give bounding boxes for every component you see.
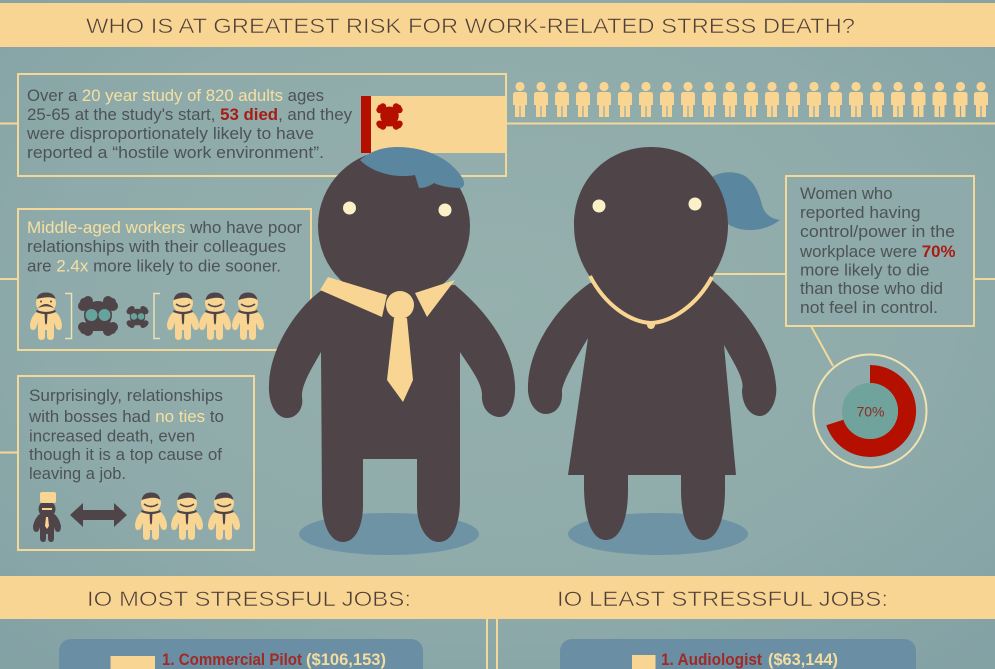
man figure <box>269 147 515 555</box>
woman shadow <box>568 513 748 555</box>
section header band: IO MOST STRESSFUL JOBS: <box>87 588 411 611</box>
icon: double arrow <box>70 503 127 527</box>
panel: women with control: more likely to die <box>800 262 930 280</box>
panel: women with control: control/power in the <box>800 223 955 241</box>
man tie knot <box>386 291 414 319</box>
woman body <box>528 280 776 540</box>
icon: unhappy worker <box>30 292 62 340</box>
icon: three happy workers <box>135 492 240 540</box>
man head <box>318 150 470 302</box>
panel: least stressful jobs <box>560 639 916 669</box>
panel: 20 year study: 25-65 at the study's start, 53 died, and they <box>27 106 353 124</box>
panel: most stressful jobs: ($106,153) <box>306 651 386 669</box>
title band <box>0 3 995 47</box>
panel: 20 year study: were disproportionately likely to have <box>26 125 314 143</box>
section header band <box>0 576 995 619</box>
panel: relationships with bosses: with bosses had no ties to <box>28 408 224 426</box>
connector lines <box>0 124 995 452</box>
panel: 20 year study: reported a “hostile work environment”. <box>27 144 324 162</box>
panel: relationships with bosses <box>18 376 254 550</box>
panel: women with control: reported having <box>800 204 920 222</box>
woman necklace <box>590 276 712 329</box>
panel: middle-aged workers <box>18 209 311 350</box>
panel: 20 year study <box>18 74 506 176</box>
woman eyes <box>592 198 702 212</box>
man tie <box>387 318 413 402</box>
panel: middle-aged workers: are 2.4x more likely to die sooner. <box>27 258 281 276</box>
donut chart: 70% <box>814 354 926 468</box>
section header band: IO LEAST STRESSFUL JOBS: <box>557 588 888 611</box>
man eyes <box>343 202 452 216</box>
man shadow <box>299 513 479 555</box>
divider lines <box>487 619 497 669</box>
panel: least stressful jobs: 1. Audiologist <box>661 651 762 669</box>
panel: relationships with bosses: leaving a job. <box>29 465 126 483</box>
man collar <box>320 277 455 317</box>
panel: least stressful jobs: ($63,144) <box>768 651 838 669</box>
woman ponytail <box>712 172 780 230</box>
icon: left bracket <box>154 294 160 338</box>
panel: relationships with bosses: though it is a top cause of <box>29 446 222 464</box>
woman head <box>574 147 728 322</box>
icon: three happy workers <box>167 292 264 340</box>
man body <box>269 285 515 542</box>
icon: small skull <box>126 306 148 328</box>
panel: 20 year study: Over a 20 year study of 820 adults ages <box>27 87 324 105</box>
panel: most stressful jobs <box>59 639 423 669</box>
donut chart: 70%: 70% <box>856 404 885 420</box>
panel: middle-aged workers: Middle-aged workers who have poor <box>27 219 303 237</box>
title band: WHO IS AT GREATEST RISK FOR WORK-RELATED STRESS DEATH? <box>86 15 855 38</box>
man hair <box>360 147 464 188</box>
flag with red skull <box>361 96 505 153</box>
panel: women with control <box>786 176 974 326</box>
icon: boss with top hat <box>33 492 61 542</box>
panel: relationships with bosses: Surprisingly, relationships <box>29 387 223 405</box>
panel: women with control: workplace were 70% <box>799 243 956 261</box>
panel: middle-aged workers: relationships with their colleagues <box>27 238 286 256</box>
woman figure <box>528 147 780 555</box>
panel: women with control: Women who <box>800 185 892 203</box>
panel: women with control: not feel in control. <box>800 299 938 317</box>
icon: right bracket <box>65 294 72 338</box>
icon: large skull <box>78 296 118 336</box>
panel: women with control: than those who did <box>800 280 943 298</box>
row of small people <box>513 82 988 117</box>
panel: most stressful jobs: 1. Commercial Pilot <box>162 651 302 669</box>
panel: relationships with bosses: increased death, even <box>29 428 195 446</box>
